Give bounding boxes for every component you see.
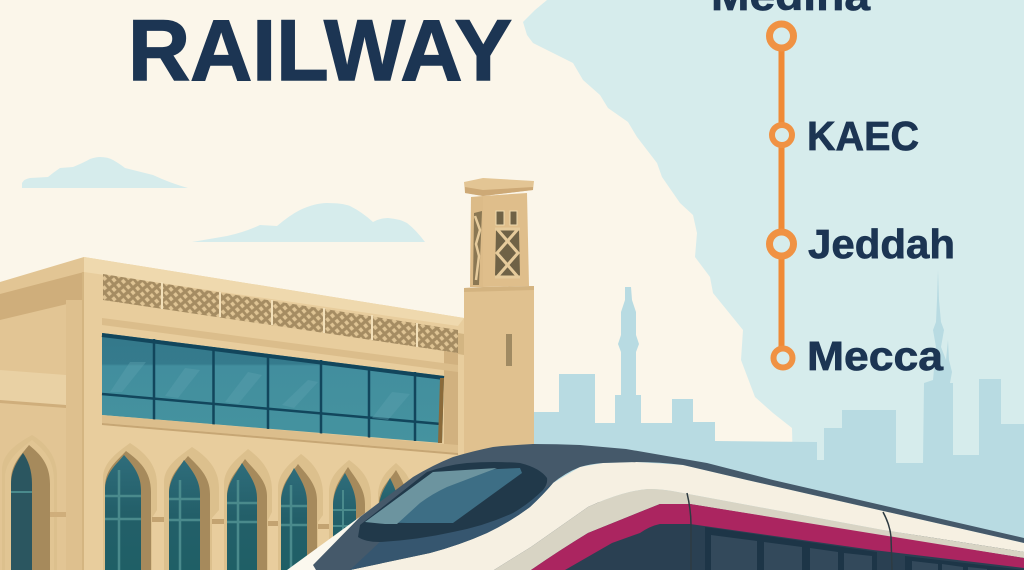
station label: KAEC: KAEC [807, 113, 919, 159]
map: coastline of Saudi Arabia [523, 0, 1024, 470]
train: windshield surround [358, 462, 547, 542]
title: RAILWAY [128, 3, 512, 99]
station marker: Medina [770, 24, 794, 48]
clerestory window [102, 333, 444, 443]
train: windshield glass [365, 468, 522, 524]
train: cream upper body [350, 462, 1024, 570]
arch [164, 447, 226, 570]
station label: Mecca: Mecca [807, 333, 944, 379]
cloud: left [22, 157, 188, 188]
station marker: KAEC [772, 125, 792, 145]
train: windows [705, 527, 1024, 570]
arch [378, 463, 413, 530]
left wall [0, 257, 84, 570]
high-speed train [287, 444, 1024, 570]
train: grey stripe [494, 489, 1024, 570]
train: lower nose panel [350, 483, 553, 570]
train: lower dark body [480, 500, 1024, 570]
route line [778, 36, 784, 358]
skyline: left [534, 287, 817, 470]
arch [329, 460, 371, 570]
station label: Jeddah: Jeddah [808, 221, 955, 267]
arch [224, 449, 280, 570]
arch row [2, 435, 413, 570]
train: white nose edge [287, 490, 420, 570]
train: dark roof and nose [313, 444, 1024, 570]
facade [84, 257, 464, 570]
route line with stations [770, 24, 794, 368]
frieze: lattice panels [103, 274, 458, 353]
arch [2, 435, 66, 570]
station marker: Jeddah [770, 232, 794, 256]
train: door seams [687, 493, 892, 570]
ledge below window [102, 415, 458, 453]
arch [103, 443, 168, 570]
band above window [102, 318, 458, 372]
tower [464, 178, 534, 460]
arch [278, 454, 331, 570]
cloud: centre [192, 203, 425, 242]
train: magenta stripe [531, 504, 1024, 570]
station marker: Mecca [774, 348, 792, 368]
station building [0, 178, 534, 570]
skyline: right [534, 270, 1024, 570]
